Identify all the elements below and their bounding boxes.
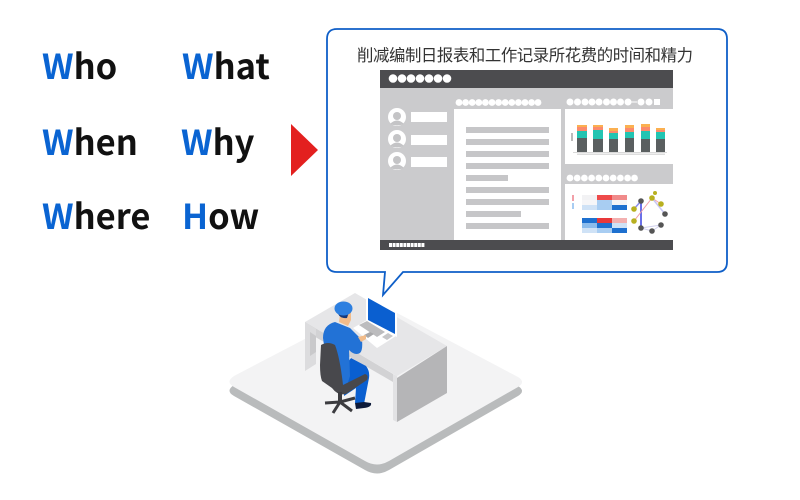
window background xyxy=(380,70,673,250)
cap xyxy=(334,302,352,316)
speech bubble xyxy=(327,29,727,295)
torso xyxy=(323,322,362,392)
word: What: What xyxy=(182,39,270,89)
center panel lines xyxy=(466,127,549,229)
person xyxy=(323,302,371,409)
center panel heading dots xyxy=(456,99,541,106)
center text panel xyxy=(454,109,561,240)
platform shadow xyxy=(230,312,522,474)
legs xyxy=(344,358,369,404)
heading group: 5W1H words xyxy=(42,39,270,239)
arrow: red triangle xyxy=(291,124,318,176)
title bar xyxy=(380,70,673,88)
platform xyxy=(230,304,522,464)
neck and face xyxy=(339,311,351,326)
hair xyxy=(337,311,349,318)
word: Where: Where xyxy=(42,189,150,239)
heatmap and network panel xyxy=(565,184,673,240)
bubble caption: 削减编制日报表和工作记录所花费的时间和精力 xyxy=(357,47,693,65)
word: When: When xyxy=(42,115,138,165)
stacked bar chart panel xyxy=(565,109,673,164)
laptop xyxy=(353,296,397,348)
status bar xyxy=(380,240,673,250)
dashboard screenshot xyxy=(380,70,673,250)
desk xyxy=(305,293,447,422)
word: Why: Why xyxy=(181,115,255,165)
chair xyxy=(320,343,368,413)
word: Who: Who xyxy=(42,39,117,89)
user list xyxy=(388,108,447,170)
word: How: How xyxy=(182,189,259,239)
network graph xyxy=(631,191,668,234)
title bar dots xyxy=(389,74,451,83)
illustration: isometric desk worker xyxy=(230,293,522,474)
heatmap xyxy=(572,195,627,233)
shoe xyxy=(355,402,371,409)
hand xyxy=(358,335,366,342)
right panel heading dots xyxy=(566,98,660,106)
lower panel heading dots xyxy=(567,175,638,181)
